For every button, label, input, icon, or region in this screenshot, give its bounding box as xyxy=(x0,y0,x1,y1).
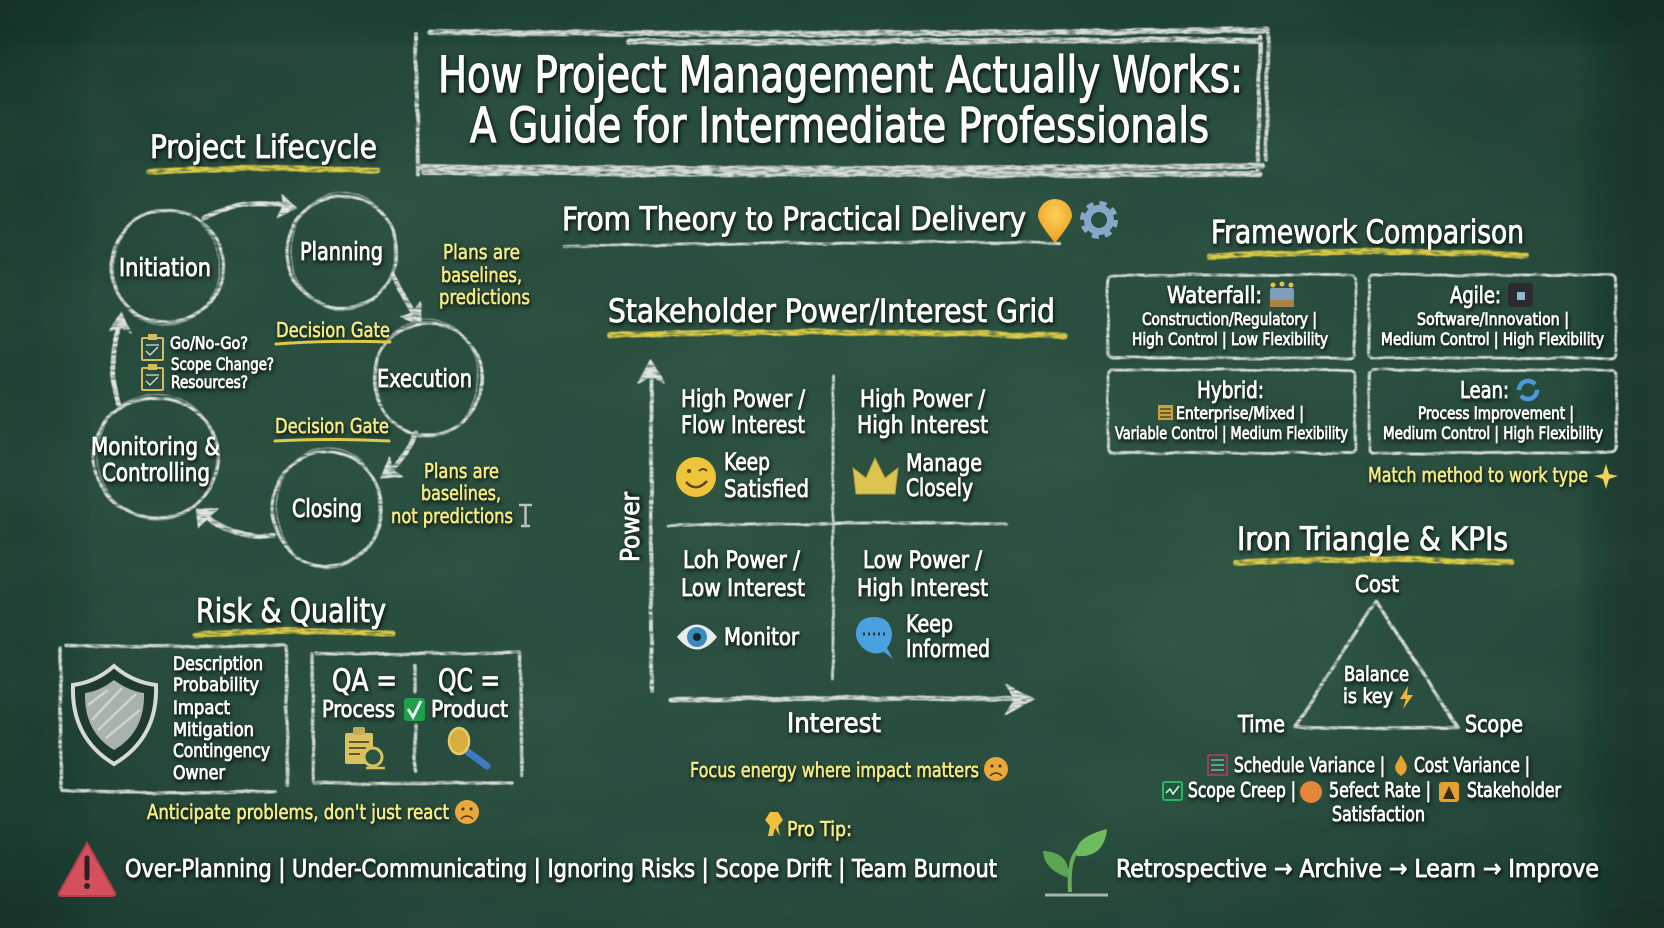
subtitle underline xyxy=(565,242,1060,247)
label: balance is key: Balance xyxy=(1344,662,1409,686)
stage: monitoring and controlling: Monitoring & xyxy=(91,432,220,461)
title frame xyxy=(416,30,1268,175)
stage: monitoring and controlling xyxy=(91,432,220,487)
panel: from theory to practical delivery xyxy=(562,199,1116,247)
card: agile: Medium Control | High Flexibility xyxy=(1381,330,1604,350)
icon: crown xyxy=(853,458,898,494)
icon: sprout xyxy=(1043,829,1108,895)
quadrant: keep informed: Keep xyxy=(906,610,953,638)
risk fields: Mitigation xyxy=(173,719,254,741)
label: balance is key xyxy=(1343,662,1413,709)
KPI list: Scope Creep | xyxy=(1188,778,1296,802)
quadrant: keep informed: Low Power / xyxy=(863,546,983,574)
panel: framework comparison xyxy=(1108,213,1618,489)
note: plans are baselines, predictions xyxy=(439,240,530,309)
decision gate two: Decision Gate xyxy=(275,414,389,438)
card: waterfall: High Control | Low Flexibility xyxy=(1132,330,1328,350)
icon: green check xyxy=(404,698,425,721)
framework box outlines xyxy=(1108,275,1616,453)
quadrant: keep satisfied: Flow Interest xyxy=(681,411,805,439)
axis label: interest: Interest xyxy=(787,708,881,739)
stage: monitoring and controlling: Controlling xyxy=(102,458,210,487)
note: plans are baselines, not predictions xyxy=(391,459,513,528)
icon: agile device xyxy=(1508,283,1533,307)
card: agile xyxy=(1381,283,1604,350)
icon: pin xyxy=(765,812,783,836)
quadrant: manage closely: High Interest xyxy=(857,411,988,439)
tip: anticipate problems: Anticipate problems, don't just react xyxy=(147,800,449,824)
icon: warning triangle xyxy=(59,843,115,896)
label: cost: Cost xyxy=(1355,572,1399,598)
footer: common pitfalls xyxy=(59,843,997,896)
stage: closing: Closing xyxy=(292,494,362,523)
improvement loop text: Retrospective → Archive → Learn → Improve xyxy=(1116,854,1599,883)
card: waterfall: Construction/Regulatory | xyxy=(1142,310,1317,330)
tip: focus energy: Focus energy where impact matters xyxy=(690,758,979,782)
icon: waterfall xyxy=(1270,282,1294,307)
decision gate one: Decision Gate xyxy=(276,318,390,342)
card: lean: Process Improvement | xyxy=(1418,404,1574,424)
card: waterfall xyxy=(1132,282,1328,350)
KPI list: Schedule Variance | xyxy=(1234,753,1385,777)
title text: How Project Management Actually Works: xyxy=(438,46,1243,104)
KPI list: Cost Variance | xyxy=(1414,753,1530,777)
label: scope: Scope xyxy=(1465,712,1523,738)
risk fields: Probability xyxy=(173,674,259,696)
icon: scope creep xyxy=(1163,782,1182,800)
stage: initiation: Initiation xyxy=(119,253,211,282)
risk fields: Contingency xyxy=(173,740,270,762)
heading: risk and quality: Risk & Quality xyxy=(196,591,386,630)
note: plans are baselines, predictions: baselines, xyxy=(441,263,522,287)
icon: lean cycle xyxy=(1519,381,1537,399)
icon: checklist clipboards xyxy=(142,335,163,390)
quadrant: keep satisfied: Satisfied xyxy=(724,475,809,503)
heading: stakeholder grid: Stakeholder Power/Interest Grid xyxy=(608,292,1055,330)
icon: schedule chart xyxy=(1208,755,1227,775)
heading: framework comparison: Framework Comparison xyxy=(1211,213,1524,251)
quadrant: keep informed: High Interest xyxy=(857,574,988,602)
icon: lightning bolt xyxy=(1400,686,1413,709)
QA text: Process xyxy=(322,697,395,723)
panel: stakeholder grid xyxy=(608,292,1065,782)
card: agile: Agile: xyxy=(1450,283,1501,309)
panel: risk and quality xyxy=(60,591,522,824)
subtitle: From Theory to Practical Delivery xyxy=(562,200,1026,238)
quadrant: manage closely: Closely xyxy=(906,474,973,502)
stage: execution: Execution xyxy=(377,364,472,393)
card: hybrid: Variable Control | Medium Flexibility xyxy=(1115,424,1348,444)
decision gate questions: Resources? xyxy=(171,373,248,393)
decision gate questions xyxy=(170,334,274,393)
quadrant: keep satisfied: High Power / xyxy=(681,385,806,413)
icon: eye xyxy=(677,624,717,650)
footer: continuous improvement xyxy=(1043,829,1599,895)
KPI list xyxy=(1163,753,1562,826)
icon: money bag xyxy=(1395,755,1407,776)
icon: smiley xyxy=(676,457,716,497)
icon: sparkle xyxy=(1594,464,1618,489)
KPI list: Satisfaction xyxy=(1332,802,1425,826)
icon: clipboard with magnifier xyxy=(345,727,385,768)
QC text: QC = xyxy=(438,663,500,699)
risk fields: Description xyxy=(173,653,263,675)
QC text: Product xyxy=(431,697,508,723)
quadrant: keep satisfied xyxy=(676,385,809,503)
card: hybrid: Enterprise/Mixed | xyxy=(1176,404,1304,424)
icon: shield xyxy=(73,666,156,764)
iron triangle xyxy=(1295,601,1457,728)
quadrant: manage closely: High Power / xyxy=(860,385,986,413)
risk register box xyxy=(60,645,288,793)
lifecycle circles and arrows xyxy=(93,192,482,568)
quadrant: monitor: Low Interest xyxy=(681,574,805,602)
card: lean: Medium Control | High Flexibility xyxy=(1383,424,1603,444)
decision gate questions: Scope Change? xyxy=(171,355,274,375)
note: plans are baselines, not predictions: not predictions xyxy=(391,504,513,528)
icon: frowning face xyxy=(455,800,479,824)
quadrant: monitor xyxy=(677,546,805,651)
card: hybrid: Hybrid: xyxy=(1197,378,1264,404)
axis label: power: Power xyxy=(616,492,646,562)
grid axes xyxy=(638,360,1034,714)
title block xyxy=(416,30,1268,175)
quadrant: monitor: Loh Power / xyxy=(683,546,801,574)
risk fields: Owner xyxy=(173,762,226,784)
card: agile: Software/Innovation | xyxy=(1417,310,1569,330)
heading: iron triangle: Iron Triangle & KPIs xyxy=(1237,520,1508,558)
panel: iron triangle and KPIs xyxy=(1163,520,1562,826)
heading: project lifecycle: Project Lifecycle xyxy=(150,128,377,166)
KPI list: 5efect Rate | xyxy=(1329,778,1431,802)
tip: match method: Match method to work type xyxy=(1368,463,1588,487)
panel: project lifecycle xyxy=(91,128,532,568)
label: balance is key: is key xyxy=(1343,684,1393,708)
QA and QC box xyxy=(312,652,522,784)
quadrant: manage closely xyxy=(853,385,988,502)
icon: gear xyxy=(1082,204,1116,236)
card: waterfall: Waterfall: xyxy=(1167,283,1262,309)
note: plans are baselines, predictions: Plans are xyxy=(443,240,520,264)
quadrant: keep satisfied: Keep xyxy=(724,448,770,476)
stage: planning: Planning xyxy=(300,237,383,266)
card: hybrid xyxy=(1115,378,1348,444)
note: plans are baselines, not predictions: Plans are xyxy=(424,459,499,483)
pitfalls text: Over-Planning | Under-Communicating | Ignoring Risks | Scope Drift | Team Burnout xyxy=(125,854,997,883)
QA text xyxy=(322,663,397,723)
icon: light bulb xyxy=(1038,199,1072,243)
card: lean xyxy=(1383,378,1603,444)
title text xyxy=(438,46,1243,154)
icon: speech bubble xyxy=(856,617,893,659)
title text: A Guide for Intermediate Professionals xyxy=(470,98,1209,154)
pro tip xyxy=(765,812,852,841)
QA text: QA = xyxy=(332,663,397,699)
quadrant: keep informed xyxy=(856,546,990,663)
icon: magnifier xyxy=(449,728,487,766)
label: time: Time xyxy=(1237,712,1285,738)
icon: stakeholder badge xyxy=(1439,782,1459,802)
risk fields: Impact xyxy=(173,697,230,719)
risk fields xyxy=(173,653,270,784)
card: lean: Lean: xyxy=(1460,378,1509,404)
icon: sad face xyxy=(984,757,1008,781)
quadrant: keep informed: Informed xyxy=(906,635,990,663)
icon: hybrid ledger xyxy=(1158,405,1173,420)
quadrant: monitor: Monitor xyxy=(724,623,799,651)
decision gate questions: Go/No-Go? xyxy=(170,334,248,354)
KPI list: Stakeholder xyxy=(1467,778,1562,802)
icon: defect face xyxy=(1300,781,1322,803)
icon: text cursor xyxy=(519,505,532,526)
note: plans are baselines, not predictions: baselines, xyxy=(421,481,501,505)
pro tip: Pro Tip: xyxy=(787,817,852,841)
quadrant: manage closely: Manage xyxy=(906,449,982,477)
note: plans are baselines, predictions: predictions xyxy=(439,285,530,309)
QC text xyxy=(431,663,508,723)
